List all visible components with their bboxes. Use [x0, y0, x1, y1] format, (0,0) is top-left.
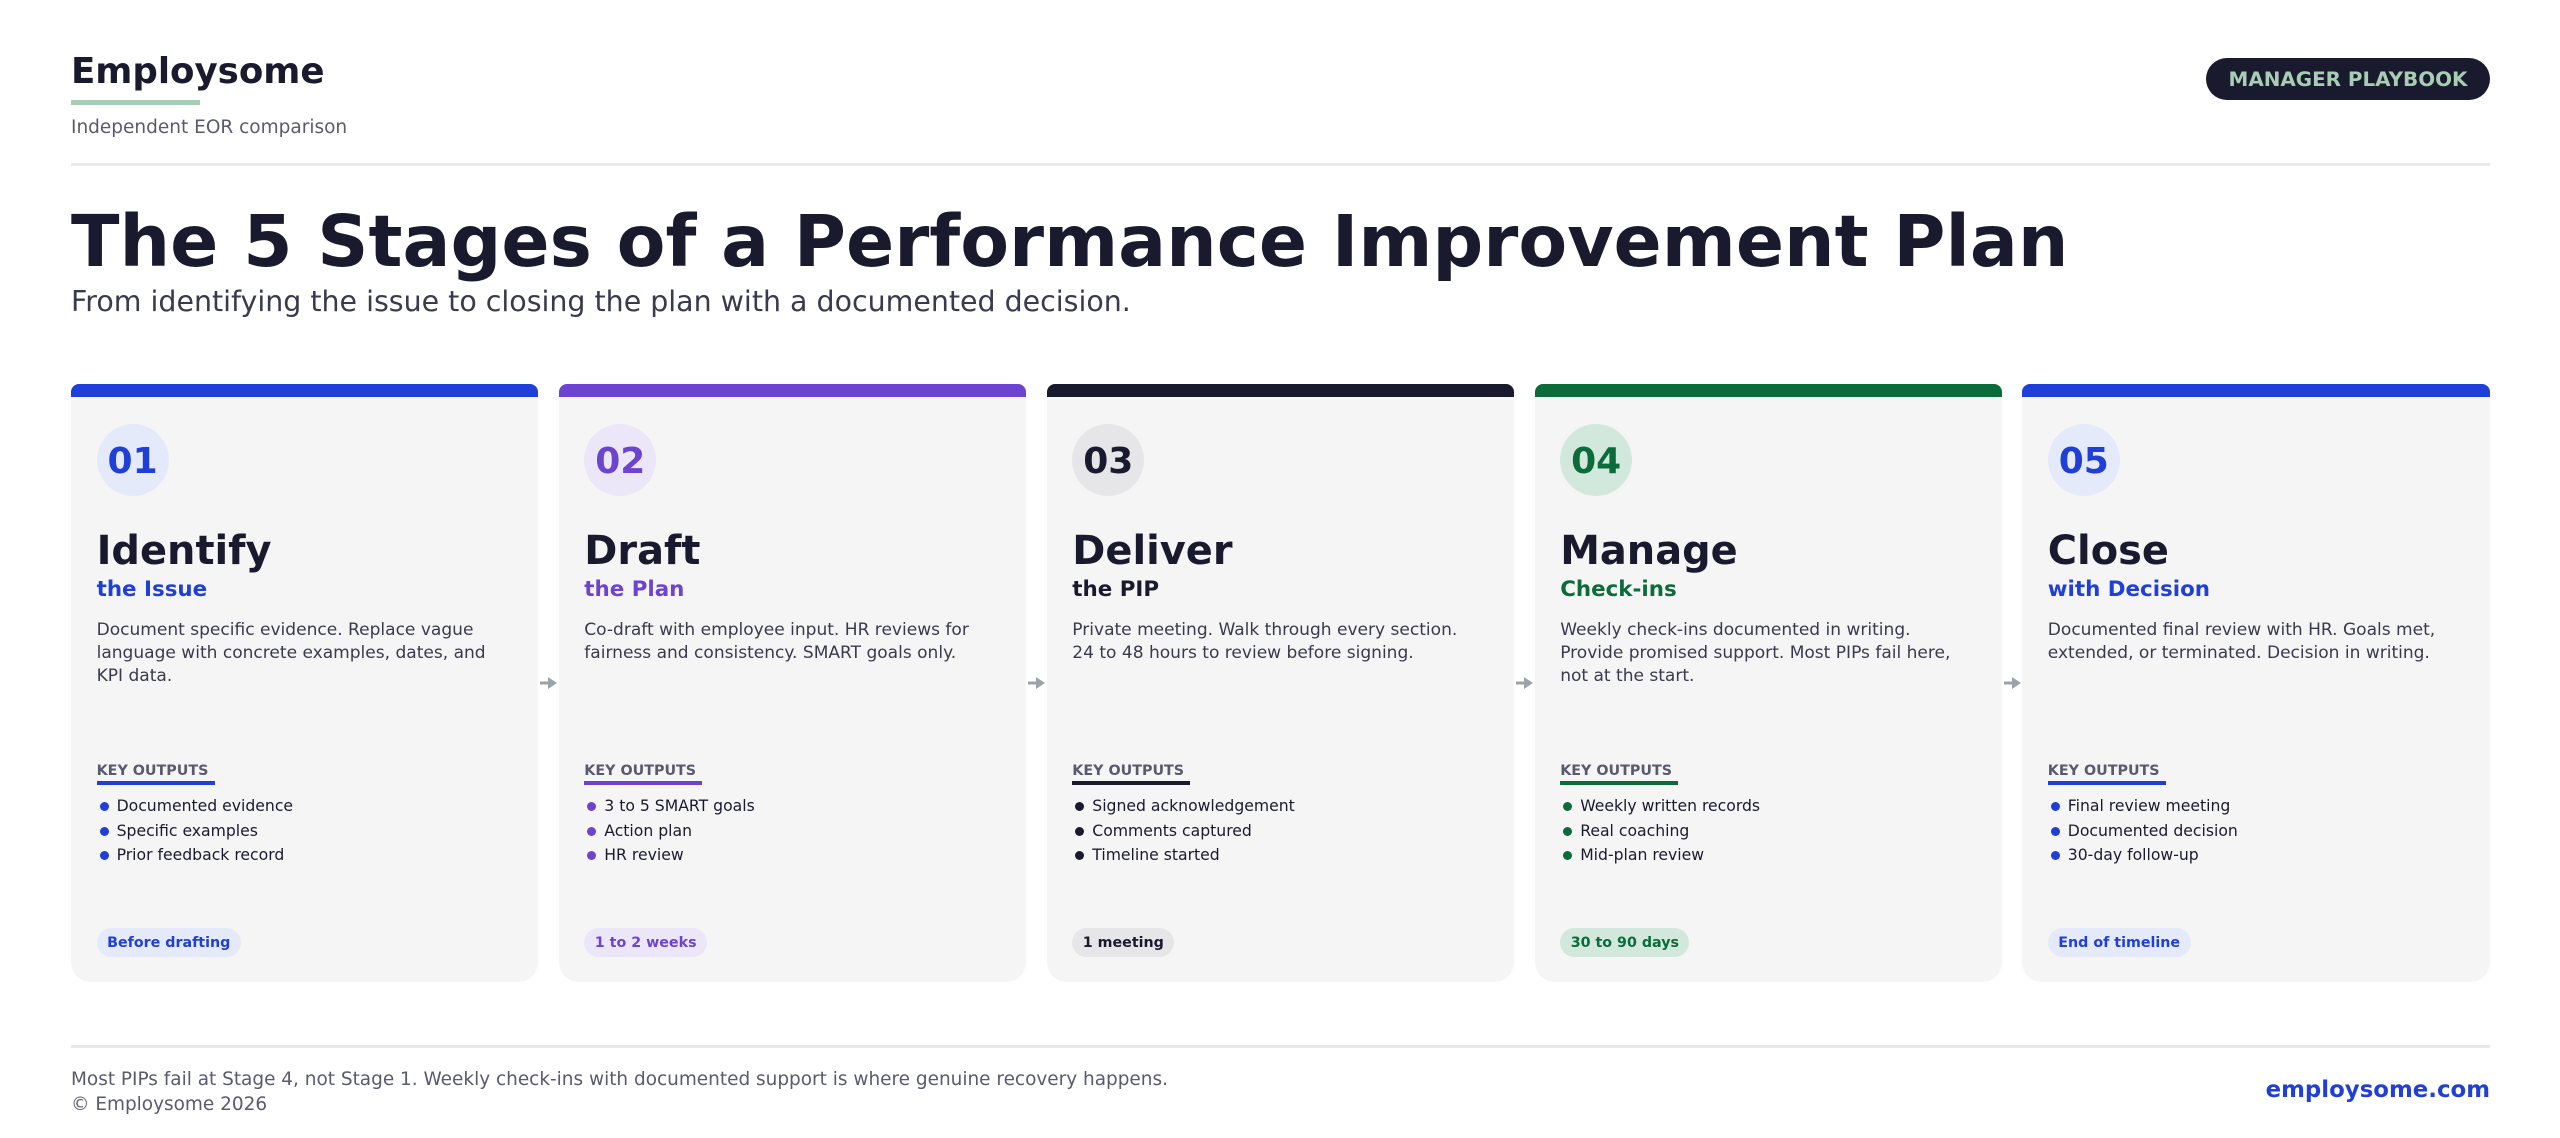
key outputs list: Documented evidence: [117, 796, 293, 815]
key outputs list: [1075, 796, 1295, 864]
brand accent underline: [71, 100, 200, 104]
description: not at the start.: [1560, 666, 1694, 686]
key outputs list: Weekly written records: [1580, 796, 1760, 815]
heading: draft: Draft: [584, 528, 700, 574]
stage number 01: 01: [108, 441, 158, 482]
key outputs list: [100, 796, 293, 864]
key outputs list: Signed acknowledgement: [1092, 796, 1295, 815]
description: 24 to 48 hours to review before signing.: [1072, 642, 1414, 662]
stage number 03: 03: [1083, 441, 1133, 482]
stage number 03: [1072, 424, 1144, 496]
footer website: employsome.com: [2266, 1076, 2490, 1102]
description: Document specific evidence. Replace vague: [97, 620, 473, 640]
timing pill: Before drafting: [107, 935, 230, 951]
key outputs list: Comments captured: [1092, 820, 1252, 840]
key outputs list: [587, 796, 755, 864]
panel: stage 1 identify: [71, 384, 538, 982]
subheading: the plan: the Plan: [584, 577, 684, 602]
card 3 top bar: [1047, 384, 1514, 397]
description: Weekly check-ins documented in writing.: [1560, 620, 1911, 640]
description: [1560, 620, 1950, 686]
key outputs list: HR review: [604, 845, 684, 864]
key outputs list: Real coaching: [1580, 820, 1689, 840]
timing pill: [2048, 928, 2191, 957]
title: The 5 Stages of a Performance Improvement Plan: [71, 200, 2068, 282]
timing pill: [1560, 928, 1689, 957]
arrow 1 to 2: [540, 677, 557, 689]
card 5 top bar: [2022, 384, 2490, 397]
heading: close: Close: [2048, 528, 2169, 574]
subheading: the issue: the Issue: [97, 577, 207, 602]
card 4 top bar: [1535, 384, 2002, 397]
arrow 3 to 4: [1516, 677, 1533, 689]
brand name: Employsome: [71, 50, 324, 92]
heading: manage: Manage: [1560, 528, 1738, 574]
stage number 04: [1560, 424, 1632, 496]
stage number 04: 04: [1571, 441, 1621, 482]
timing pill: [97, 928, 241, 957]
timing pill: 1 meeting: [1083, 935, 1164, 951]
description: language with concrete examples, dates, and: [97, 642, 486, 662]
footer note: [71, 1068, 1168, 1114]
panel: stage 2 draft: [559, 384, 1026, 982]
badge: manager playbook: [2206, 58, 2490, 100]
card 1 top bar: [71, 384, 538, 397]
key outputs list: [1563, 796, 1760, 864]
key outputs list: Documented decision: [2068, 820, 2238, 840]
key outputs label: KEY OUTPUTS: [97, 762, 208, 778]
key outputs label: KEY OUTPUTS: [1072, 762, 1184, 778]
key outputs list: Mid-plan review: [1580, 845, 1704, 864]
panel: stage 5 close: [2022, 384, 2490, 982]
key outputs list: [2051, 796, 2238, 864]
key outputs list: 30-day follow-up: [2068, 845, 2199, 864]
description: [584, 620, 969, 662]
timing pill: 1 to 2 weeks: [595, 935, 697, 951]
timing pill: [1072, 928, 1174, 957]
timing pill: 30 to 90 days: [1571, 935, 1679, 951]
arrow 2 to 3: [1028, 677, 1045, 689]
subheading: with decision: with Decision: [2048, 577, 2210, 602]
key outputs label: KEY OUTPUTS: [584, 762, 696, 778]
description: [1072, 620, 1457, 662]
subtitle: From identifying the issue to closing the plan with a documented decision.: [71, 285, 1131, 318]
footer note: Most PIPs fail at Stage 4, not Stage 1. Weekly check-ins with documented support is where genuine recovery happens.: [71, 1068, 1168, 1090]
stage number 02: [584, 424, 656, 496]
description: Provide promised support. Most PIPs fail here,: [1560, 642, 1950, 662]
key outputs list: 3 to 5 SMART goals: [604, 796, 755, 815]
timing pill: End of timeline: [2058, 935, 2180, 951]
description: [2048, 620, 2435, 662]
brand tagline: Independent EOR comparison: [71, 116, 347, 138]
stage number 05: [2048, 424, 2120, 496]
panel: stage 3 deliver: [1047, 384, 1514, 982]
heading: identify: Identify: [97, 528, 272, 574]
description: Private meeting. Walk through every section.: [1072, 620, 1457, 640]
heading: deliver: Deliver: [1072, 528, 1233, 574]
description: [97, 620, 486, 686]
stage number 05: 05: [2059, 441, 2109, 482]
subheading: the pip: the PIP: [1072, 577, 1159, 602]
key outputs list: Prior feedback record: [117, 845, 284, 864]
badge: manager playbook: MANAGER PLAYBOOK: [2229, 68, 2467, 91]
key outputs label: KEY OUTPUTS: [2048, 762, 2160, 778]
key outputs underline: [1072, 781, 1190, 785]
stage number 01: [97, 424, 169, 496]
key outputs label: KEY OUTPUTS: [1560, 762, 1672, 778]
key outputs underline: [2048, 781, 2166, 785]
key outputs list: Final review meeting: [2068, 796, 2230, 815]
footer note: © Employsome 2026: [71, 1094, 267, 1114]
stage number 02: 02: [595, 441, 645, 482]
key outputs list: Timeline started: [1092, 845, 1220, 864]
description: extended, or terminated. Decision in writing.: [2048, 642, 2430, 662]
description: Co-draft with employee input. HR reviews for: [584, 620, 969, 640]
timing pill: [584, 928, 707, 957]
description: fairness and consistency. SMART goals only.: [584, 642, 956, 662]
panel: stage 4 manage: [1535, 384, 2002, 982]
description: KPI data.: [97, 666, 172, 686]
key outputs list: Action plan: [604, 820, 692, 840]
subheading: check-ins: Check-ins: [1560, 577, 1677, 602]
key outputs underline: [1560, 781, 1678, 785]
key outputs list: Specific examples: [117, 820, 258, 840]
arrow 4 to 5: [2004, 677, 2021, 689]
key outputs underline: [97, 781, 215, 785]
card 2 top bar: [559, 384, 1026, 397]
key outputs underline: [584, 781, 702, 785]
description: Documented final review with HR. Goals met,: [2048, 620, 2435, 640]
